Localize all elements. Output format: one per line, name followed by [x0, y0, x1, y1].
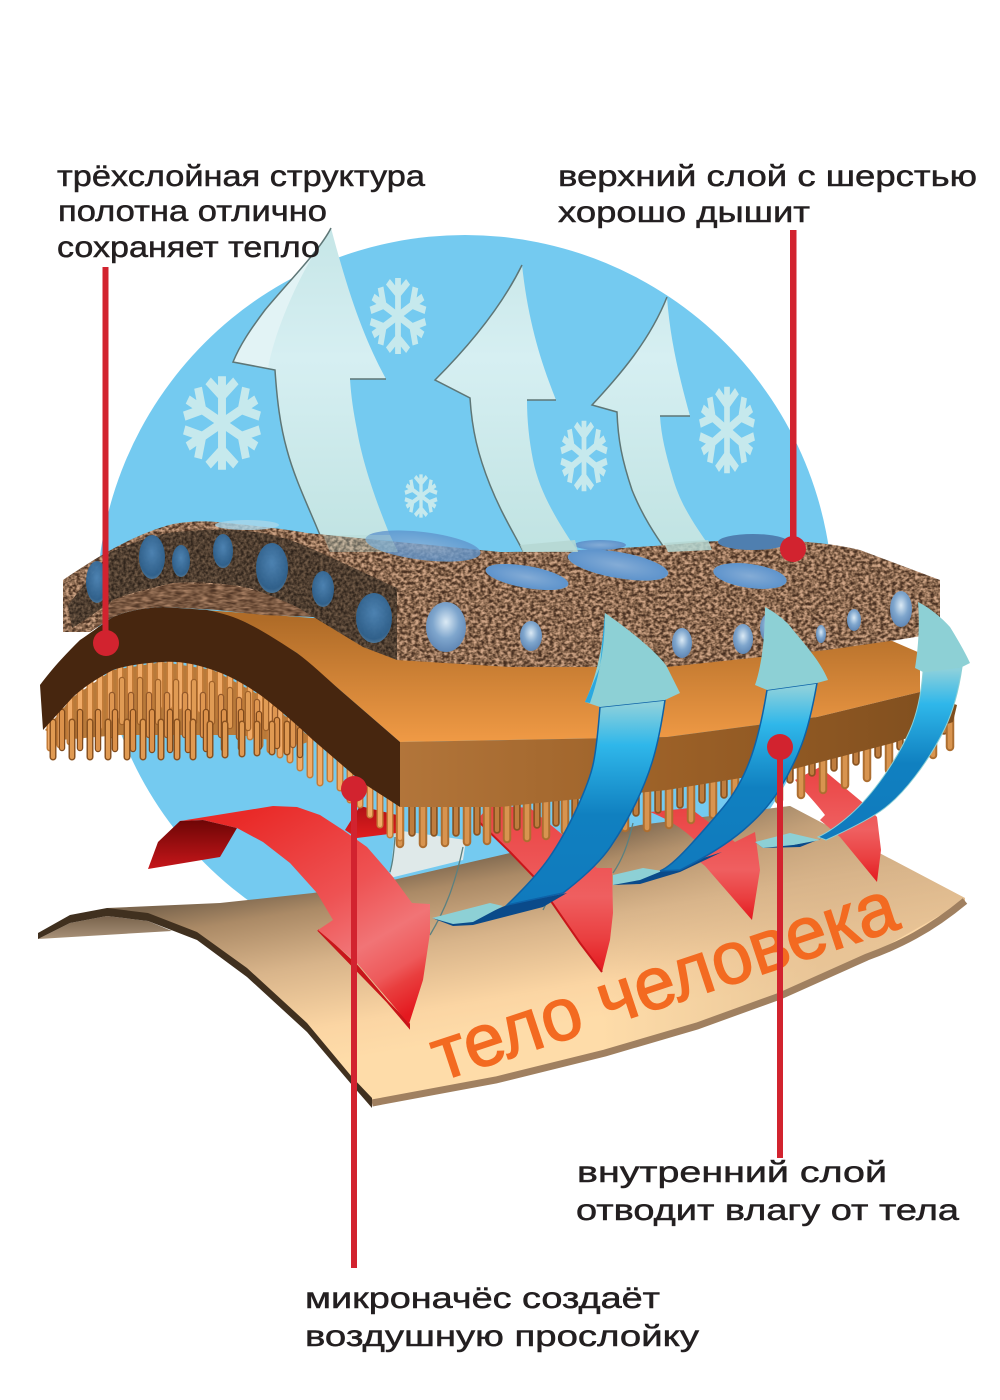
text: top layer breathes: хорошо дышит: [558, 196, 810, 229]
body left edge: [38, 908, 372, 1108]
text: pile creates air layer: [305, 1282, 699, 1353]
inner layer front face: [400, 692, 957, 807]
callout pointer: pile: [341, 776, 367, 1268]
text: inner layer wicks moisture: внутренний слой: [577, 1156, 887, 1189]
wool top and front face: [63, 521, 940, 667]
body front edge: [372, 901, 965, 1103]
text: three-layer structure: полотна отлично: [58, 195, 327, 228]
text: three-layer structure: трёхслойная структура: [57, 160, 425, 193]
arrow: moisture 1: [432, 613, 680, 926]
text: three-layer structure: сохраняет тепло: [57, 231, 320, 264]
text: three-layer structure: [57, 160, 425, 264]
red arrows: body heat: [345, 767, 881, 972]
callout pointer: inner layer: [767, 734, 793, 1158]
red arrow: main large: [148, 806, 430, 1027]
thin outlines of pale arrows below fabric: [390, 823, 633, 935]
arrow: moisture 3: [755, 602, 970, 848]
inner layer cut edge: dark brown: [40, 607, 400, 807]
text: inner layer wicks moisture: [576, 1156, 959, 1227]
callout pointer: top layer: [780, 230, 806, 562]
water drops on front face: [426, 591, 912, 658]
wool underside: [63, 575, 363, 647]
icon: snowflakes: [181, 278, 757, 518]
pale arrow feet over wool: [323, 535, 712, 552]
human body surface: [38, 806, 965, 1103]
arrow: moisture 2: [613, 607, 828, 885]
water drops on cut face: [86, 534, 392, 643]
text: pile creates air layer: воздушную прослойку: [305, 1320, 699, 1353]
text: top layer breathes: [558, 160, 977, 229]
body label: тело человека: [420, 864, 908, 1096]
callout pointer: three-layer structure: [93, 267, 119, 656]
background circle: [97, 235, 833, 971]
text: pile creates air layer: микроначёс создаёт: [305, 1282, 660, 1315]
text: top layer breathes: верхний слой с шерстью: [558, 160, 977, 193]
water drops on top surface: [215, 520, 788, 595]
inner layer: orange fleece: [163, 607, 957, 807]
arrows: pale cold air rising: [233, 228, 712, 555]
outer layer: wool: [63, 521, 940, 667]
wool cut face: [68, 530, 397, 660]
copper pile fibres: [45, 655, 950, 844]
text: inner layer wicks moisture: отводит влагу от тела: [576, 1194, 959, 1227]
